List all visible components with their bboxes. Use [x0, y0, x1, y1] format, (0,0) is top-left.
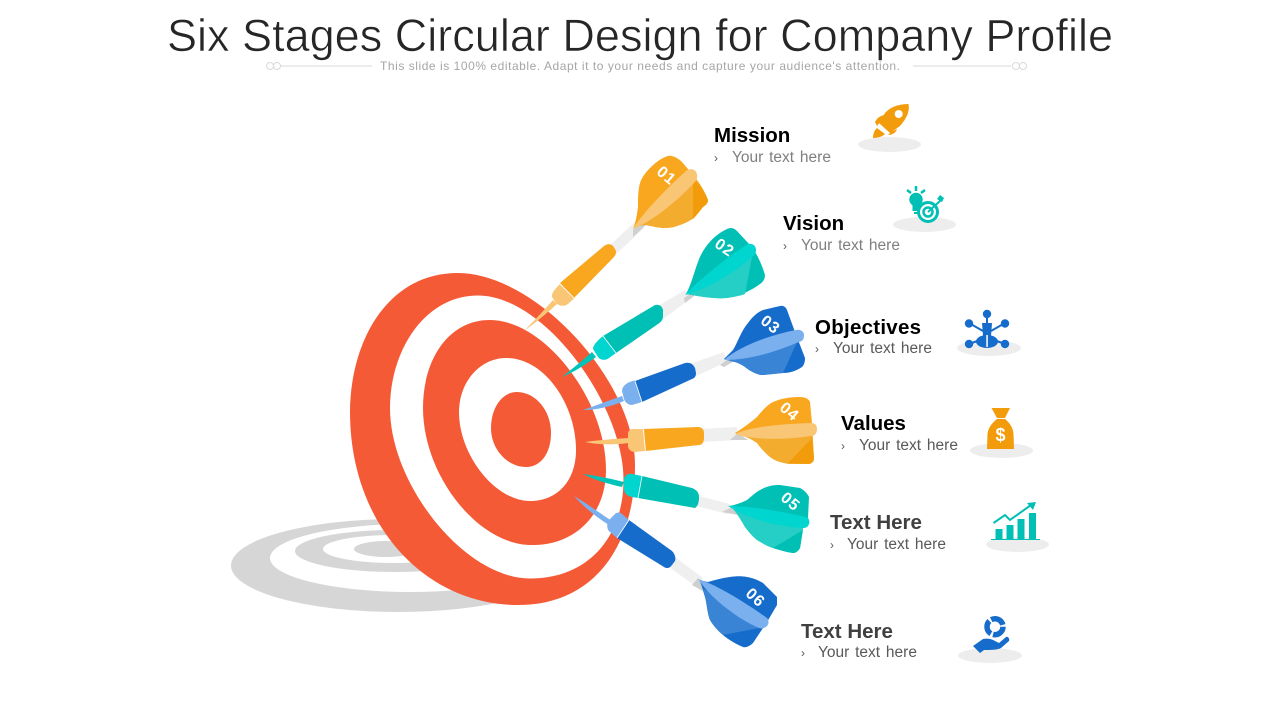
icon: bulb and target [893, 186, 956, 232]
label: Text Here 5: Your text here [847, 536, 946, 553]
dart 06 [574, 496, 777, 647]
label: Objectives [815, 316, 932, 357]
label: Vision: Vision [783, 212, 844, 235]
label: Vision: › [783, 239, 787, 253]
label: Text Here 5 [830, 511, 946, 553]
icon: growth chart [986, 502, 1049, 552]
label: Text Here 6: › [801, 646, 805, 660]
subtitle: This slide is 100% editable. Adapt it to your needs and capture your audience's attention. [380, 59, 900, 73]
icon: network [957, 310, 1021, 356]
label: Text Here 5: Text Here [830, 511, 922, 534]
target board [350, 273, 635, 605]
icon: money bag: $ [995, 425, 1006, 445]
label: Text Here 6: Text Here [801, 620, 893, 643]
dart 01: 01 [653, 163, 679, 189]
label: Vision: Your text here [801, 237, 900, 254]
dart 01 [524, 156, 708, 331]
label: Values: › [841, 439, 845, 453]
subtitle [266, 59, 1026, 73]
dart 04: 04 [776, 399, 802, 425]
label: Text Here 5: › [830, 538, 834, 552]
target shadow [231, 519, 565, 612]
label: Mission: › [714, 151, 718, 165]
label: Text Here 6: Your text here [818, 644, 917, 661]
dart 03 [583, 306, 805, 410]
label: Values [841, 412, 958, 454]
label: Values: Your text here [859, 437, 958, 454]
dart 03: 03 [757, 312, 783, 338]
label: Objectives: Your text here [833, 340, 932, 357]
dart 02 [562, 228, 765, 377]
dart 05: 05 [777, 489, 803, 515]
dart 06: 06 [742, 585, 768, 611]
dart 04 [585, 397, 817, 464]
icon: hand with ring [958, 619, 1022, 663]
title: Six Stages Circular Design for Company Profile [167, 10, 1113, 61]
label: Mission [714, 124, 831, 166]
label: Text Here 6 [801, 620, 917, 661]
label: Values: Values [841, 412, 906, 435]
icon: money bag [970, 408, 1033, 458]
label: Objectives: › [815, 342, 819, 356]
label: Mission: Mission [714, 124, 790, 147]
label: Vision [783, 212, 900, 254]
dart 02: 02 [711, 236, 737, 261]
dart 05 [583, 474, 809, 553]
label: Objectives: Objectives [815, 316, 921, 339]
label: Mission: Your text here [732, 149, 831, 166]
icon: rocket [858, 104, 921, 152]
